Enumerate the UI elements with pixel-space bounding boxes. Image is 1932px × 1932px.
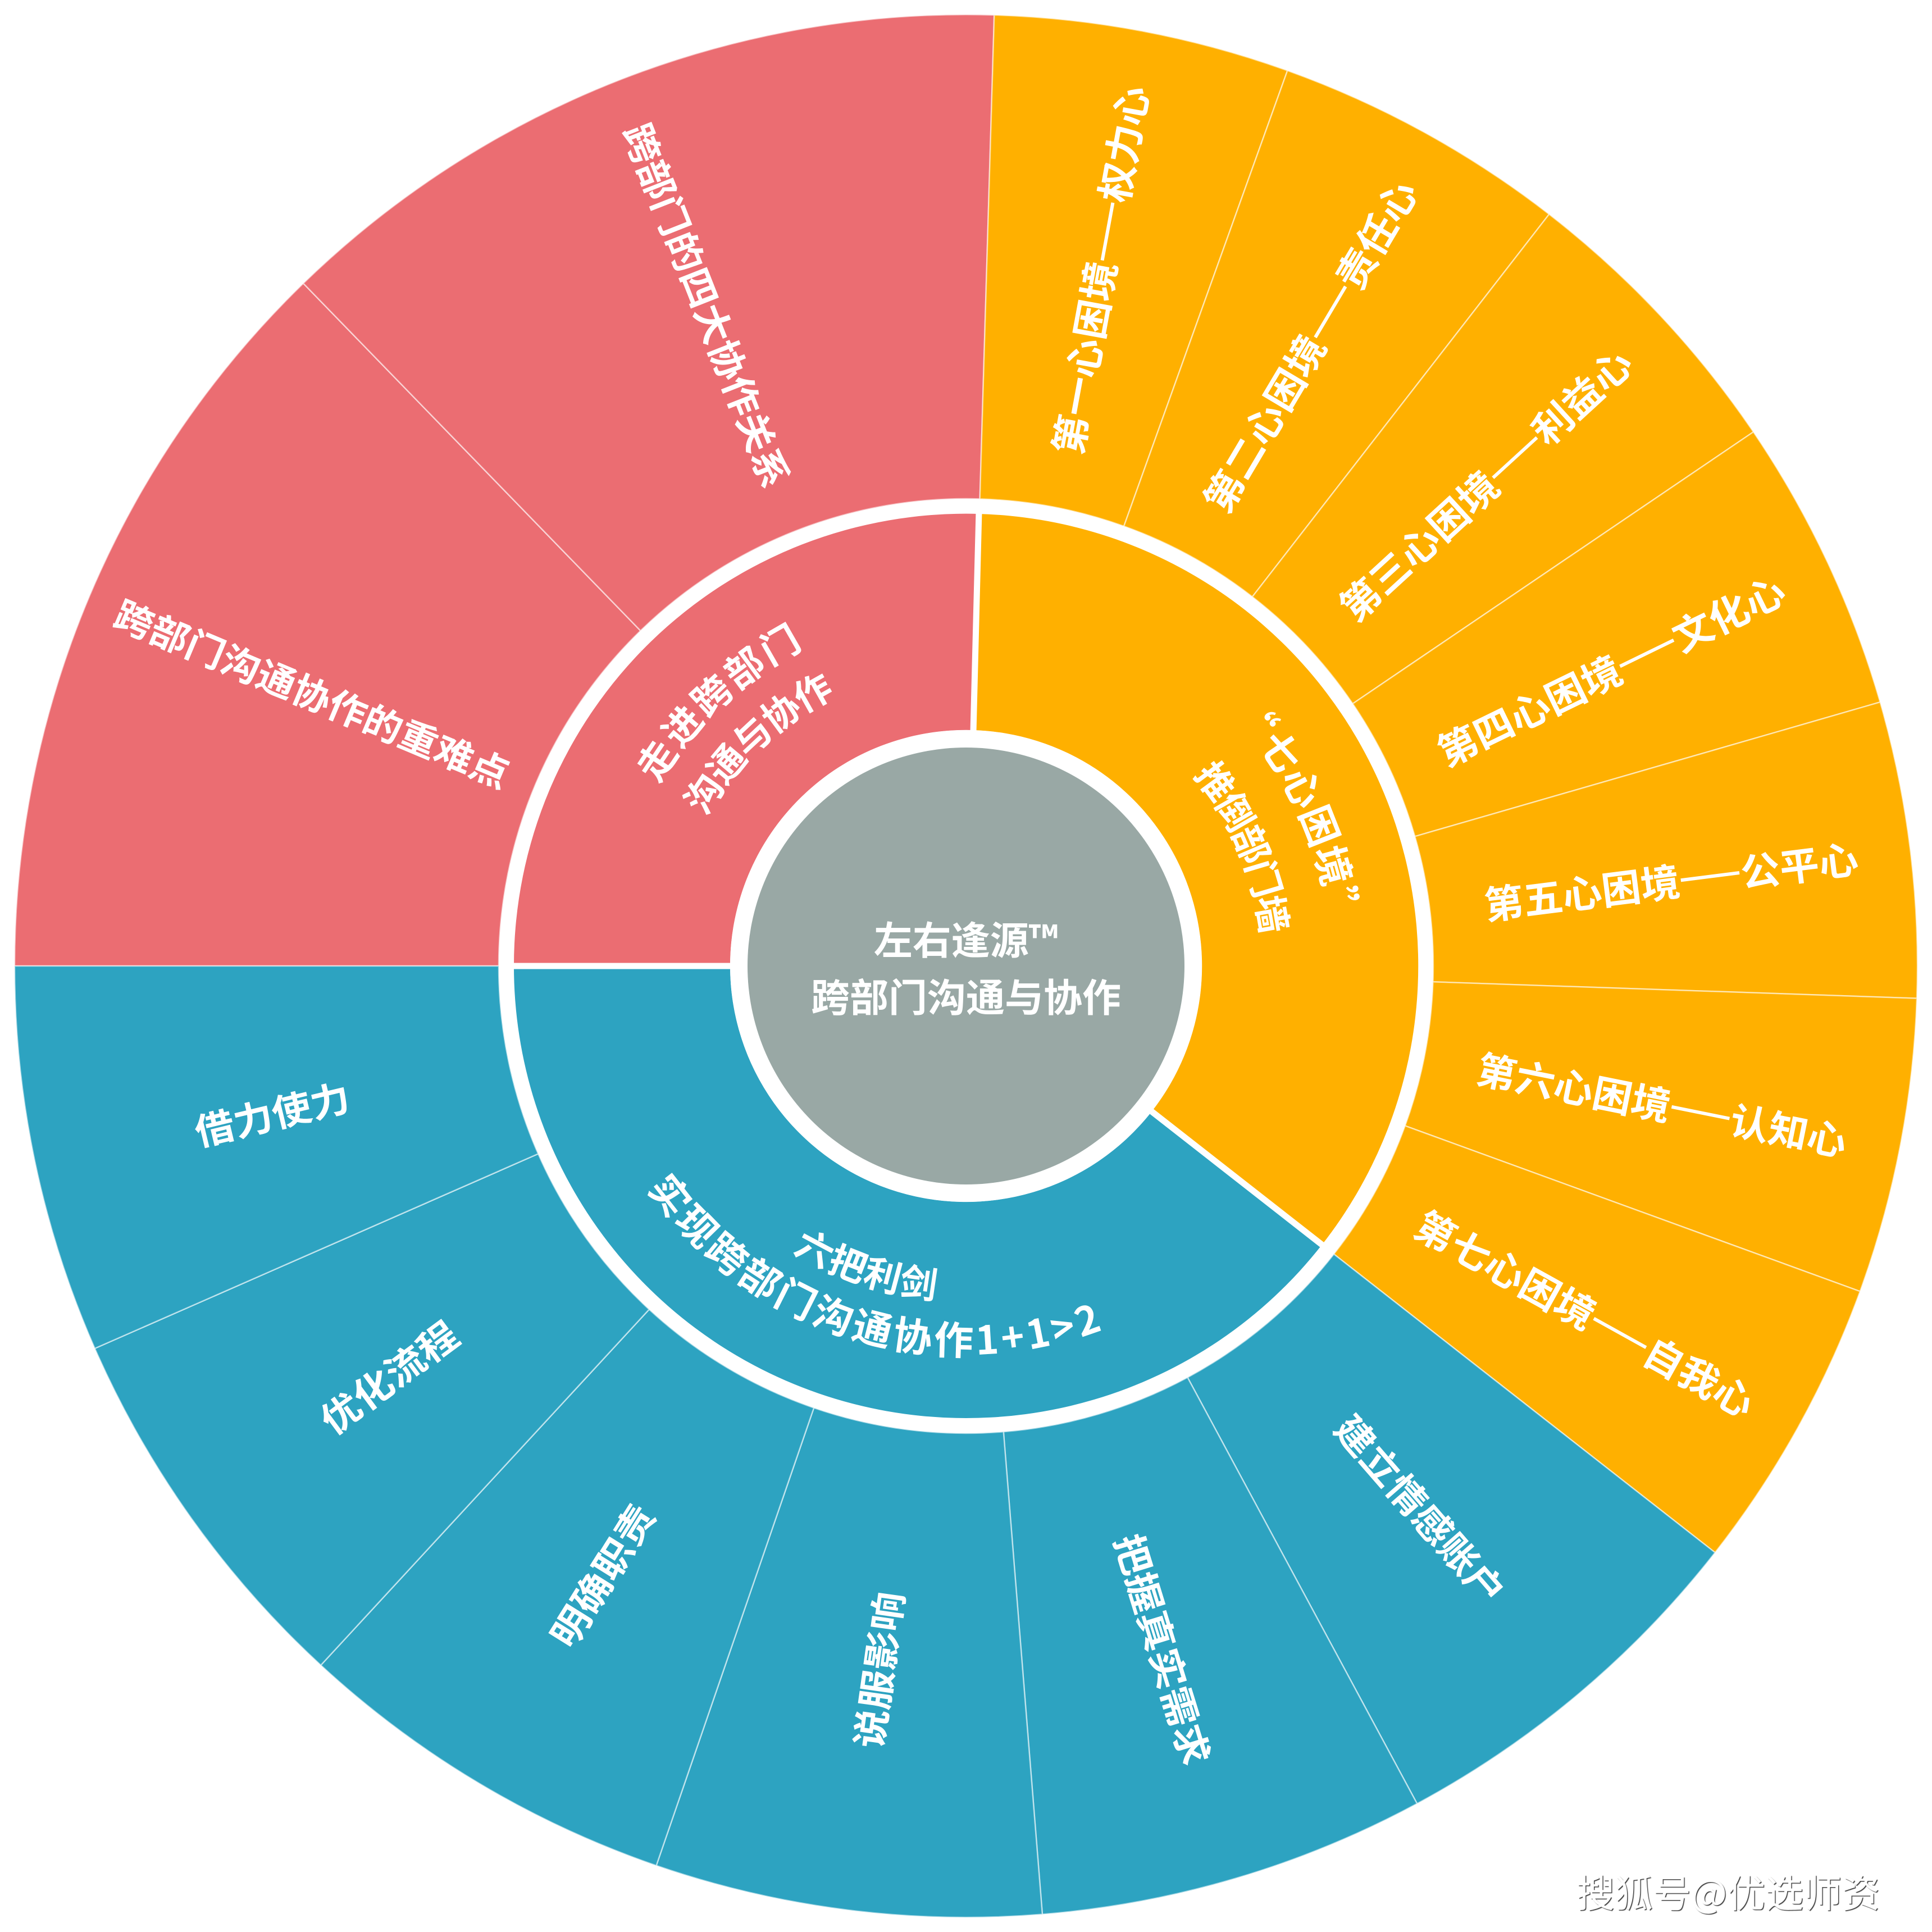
- outer segment: 第五心困境: 第五心困境——公平心: [1480, 828, 1861, 931]
- outer segment: 第六心困境: [1405, 982, 1917, 1291]
- outer segment: 第七心困境: 第七心困境——自我心: [1406, 1195, 1766, 1429]
- outer segment: 明确职责: [321, 1309, 814, 1866]
- panel: outer ring blue: [15, 966, 1715, 1917]
- outer segment: 第三心困境: [1252, 215, 1753, 704]
- panel: inner ring red 走进跨部门沟通与协作: [514, 513, 976, 963]
- heading line: 沟通与协作: 沟通与协作: [682, 673, 832, 815]
- outer segment: 跨部门的四大协作关系: [303, 15, 994, 631]
- title line 1: 左右逢源™: [874, 909, 1058, 965]
- outer segment: 明确职责: 明确职责: [536, 1493, 666, 1657]
- panel: inner ring orange 七心困境: [976, 514, 1419, 1242]
- outer segment: 跨部门的四大协作关系: 跨部门的四大协作关系: [612, 115, 804, 495]
- panel: outer ring orange: [980, 15, 1917, 1552]
- outer segment: 第三心困境: 第三心困境——利益心: [1325, 334, 1643, 632]
- heading line: 推倒部门墙: 推倒部门墙: [1192, 760, 1291, 933]
- outer segment: 第七心困境: [1334, 1126, 1860, 1552]
- heading line: 实现跨部门沟通协作1+1>2: 实现跨部门沟通协作1+1>2: [647, 1173, 1101, 1358]
- heading line: 六把利剑: 六把利剑: [793, 1232, 937, 1301]
- outer segment: 跨部门沟通协作的重难点: [15, 283, 640, 966]
- heading line: 七心困境: “七心困境”: [1265, 712, 1360, 900]
- outer segment: 第四心困境: [1353, 432, 1880, 836]
- outer segment: 第二心困境: [1124, 71, 1549, 597]
- title line 2: 跨部门沟通与协作: [811, 967, 1121, 1023]
- outer segment: 第二心困境: 第二心困境——责任心: [1188, 168, 1429, 521]
- outer segment: 把握真实需求: 把握真实需求: [1104, 1527, 1225, 1771]
- outer segment: 说服影响: 说服影响: [840, 1588, 915, 1751]
- outer segment: 建立情感账户: 建立情感账户: [1324, 1402, 1519, 1615]
- heading line: 走进跨部门: 走进跨部门: [637, 622, 801, 784]
- outer segment: 跨部门沟通协作的重难点: 跨部门沟通协作的重难点: [107, 585, 519, 800]
- outer segment: 优化流程: 优化流程: [308, 1307, 468, 1445]
- outer segment: 第四心困境: 第四心困境——文化心: [1427, 560, 1794, 778]
- outer segment: 第五心困境: [1415, 702, 1917, 999]
- outer segment: 第六心困境: 第六心困境——认知心: [1473, 1038, 1852, 1168]
- panel: inner ring blue 六把利剑: [514, 969, 1320, 1418]
- outer segment: 把握真实需求: [1004, 1378, 1417, 1914]
- outer segment: 借力使力: 借力使力: [189, 1068, 355, 1157]
- outer segment: 借力使力: [15, 966, 538, 1348]
- outer segment: 建立情感账户: [1187, 1254, 1715, 1804]
- watermark: 搜狐号@优选师资: [1576, 1863, 1880, 1919]
- centre circle with title: [730, 730, 1202, 1202]
- outer segment: 优化流程: [95, 1154, 649, 1665]
- outer segment: 说服影响: [656, 1408, 1042, 1917]
- outer segment: 第一心困境: [980, 15, 1287, 526]
- outer segment: 第一心困境: 第一心困境——权力心: [1037, 81, 1160, 458]
- panel: outer ring red: [15, 15, 994, 966]
